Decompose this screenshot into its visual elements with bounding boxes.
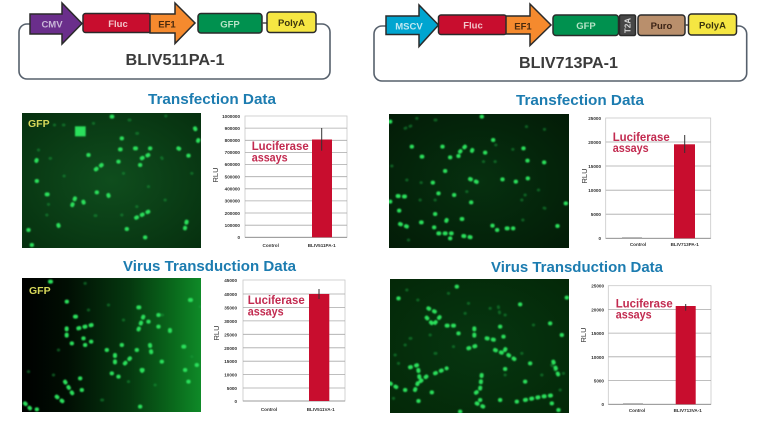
PolyA element	[267, 12, 316, 32]
callout: Luciferase assays	[613, 130, 670, 155]
y-axis labels: 700000	[225, 150, 240, 155]
y-axis title: RLU	[211, 167, 220, 183]
EF1 promoter arrow	[150, 3, 195, 44]
connector	[685, 24, 688, 26]
PolyA element	[688, 14, 736, 35]
y-axis labels: 10000	[224, 372, 237, 378]
connector	[262, 22, 267, 24]
y-axis title: RLU	[212, 325, 221, 341]
y-axis labels: 20000	[224, 346, 237, 351]
y-axis labels: 600000	[225, 162, 240, 167]
y-axis labels: 5000	[227, 386, 237, 391]
y-axis labels: 15000	[588, 164, 601, 169]
T2A element: T2A	[624, 18, 632, 33]
plasmid backbone	[374, 26, 747, 81]
callout: Luciferase assays: Luciferase	[613, 130, 670, 144]
CMV promoter arrow: CMV	[41, 20, 63, 30]
y-axis labels: 1000000	[222, 114, 240, 119]
y-axis labels: 200000	[225, 211, 240, 216]
bar chart: BLIV713PA-1 transduction	[579, 284, 711, 413]
micrograph: BLIV713PA-1 transfection	[389, 114, 569, 248]
label: GFP: GFP	[28, 118, 50, 130]
plasmid name: BLIV713PA-1	[519, 55, 618, 72]
bar chart: BLIV511PA-1 transduction	[212, 278, 345, 412]
category labels: Control	[261, 407, 277, 412]
error bar	[684, 135, 686, 153]
category labels: BLIV511PA-1	[308, 243, 336, 248]
error bar	[321, 128, 323, 151]
category labels	[263, 243, 336, 248]
EF1 promoter arrow	[506, 4, 551, 46]
y-axis labels: 25000	[224, 332, 237, 338]
control bar	[622, 237, 642, 238]
category labels: BLIV511VA-1	[307, 407, 335, 412]
Puro gene: Puro	[651, 21, 673, 32]
y-axis labels: 500000	[225, 174, 240, 180]
micrograph: BLIV511PA-1 transfection	[22, 113, 201, 248]
callout: Luciferase assays	[252, 139, 309, 164]
plasmid backbone	[19, 24, 330, 79]
callout: Luciferase assays: assays	[252, 150, 288, 164]
y-axis labels: 45000	[224, 278, 237, 283]
category labels: Control	[630, 242, 646, 247]
category labels: BLIV713PA-1	[671, 242, 699, 247]
y-axis labels: 15000	[591, 331, 604, 336]
micrograph: BLIV511PA-1 transduction	[22, 278, 201, 412]
category labels	[261, 407, 335, 412]
y-axis labels: 20000	[588, 140, 601, 145]
bar chart: BLIV511PA-1 transfection	[211, 114, 347, 248]
GFP gene	[198, 14, 262, 33]
bar	[676, 306, 696, 404]
y-axis labels: 5000	[591, 212, 601, 217]
y-axis labels: 30000	[224, 319, 237, 324]
bar	[312, 140, 332, 237]
y-axis labels: 20000	[591, 308, 604, 312]
y-axis title: RLU	[580, 168, 589, 184]
PolyA element: PolyA	[278, 18, 305, 29]
EF1 promoter arrow: EF1	[514, 22, 532, 32]
y-axis labels: 25000	[591, 284, 604, 288]
y-axis labels: 35000	[224, 306, 237, 310]
EF1 promoter arrow: EF1	[158, 20, 176, 30]
y-axis labels	[224, 278, 237, 404]
y-axis title: RLU	[579, 327, 588, 343]
T2A element	[620, 15, 636, 36]
y-axis labels: 100000	[225, 223, 240, 228]
y-axis labels	[222, 114, 240, 240]
y-axis labels: 10000	[591, 355, 604, 360]
Fluc gene	[438, 15, 506, 34]
Fluc gene: Fluc	[108, 19, 128, 30]
category labels: BLIV713VA-1	[674, 408, 702, 413]
y-axis labels: 10000	[588, 188, 601, 193]
Fluc gene: Fluc	[463, 20, 483, 32]
category labels: Control	[263, 243, 279, 248]
category labels	[630, 242, 699, 247]
y-axis labels: 5000	[594, 378, 604, 384]
heading: left transfection: Transfection Data	[148, 92, 277, 108]
y-axis labels: 0	[237, 235, 240, 240]
y-axis labels: 0	[234, 399, 237, 404]
plasmid name: BLIV511PA-1	[126, 52, 225, 69]
bar chart: BLIV713PA-1 transfection	[580, 116, 711, 247]
category labels	[629, 408, 702, 413]
error bar	[318, 289, 320, 299]
micrograph: BLIV713PA-1 transduction	[390, 279, 569, 413]
Puro gene	[638, 15, 685, 36]
callout: Luciferase assays: Luciferase	[616, 296, 673, 310]
control bar	[623, 403, 643, 404]
heading: right transfection: Transfection Data	[516, 93, 645, 109]
heading: right transduction: Virus Transduction Data	[491, 260, 664, 276]
callout: Luciferase assays: assays	[613, 141, 649, 155]
CMV promoter arrow	[30, 3, 82, 44]
y-axis labels: 25000	[588, 116, 601, 121]
callout: Luciferase assays: assays	[248, 304, 284, 318]
y-axis labels: 40000	[224, 292, 237, 297]
GFP gene: GFP	[220, 20, 240, 30]
y-axis labels: 400000	[225, 186, 240, 192]
bar	[674, 144, 695, 238]
plasmid map: BLIV511PA-1	[19, 3, 330, 79]
GFP gene	[553, 15, 618, 36]
y-axis labels: 0	[601, 402, 604, 407]
bar	[309, 294, 329, 401]
category labels: Control	[629, 408, 645, 413]
PolyA element: PolyA	[699, 20, 726, 32]
MSCV promoter arrow	[386, 5, 438, 46]
y-axis labels	[591, 284, 604, 407]
heading: left transduction: Virus Transduction Data	[123, 259, 297, 275]
y-axis labels: 15000	[224, 359, 237, 364]
y-axis labels: 900000	[225, 126, 240, 131]
GFP gene: GFP	[576, 21, 596, 32]
callout: Luciferase assays	[616, 296, 673, 322]
callout: Luciferase assays: assays	[616, 308, 652, 322]
callout: Luciferase assays: Luciferase	[248, 293, 305, 307]
label: GFP: GFP	[29, 285, 51, 297]
callout: Luciferase assays: Luciferase	[252, 139, 309, 153]
error bar	[685, 304, 687, 311]
MSCV promoter arrow: MSCV	[395, 22, 423, 32]
y-axis labels: 300000	[225, 198, 240, 204]
y-axis labels	[588, 116, 601, 241]
plasmid map: BLIV713PA-1	[374, 4, 747, 81]
y-axis labels: 800000	[225, 138, 240, 143]
callout: Luciferase assays	[248, 293, 305, 318]
y-axis labels: 0	[598, 236, 601, 241]
Fluc gene	[83, 14, 151, 32]
